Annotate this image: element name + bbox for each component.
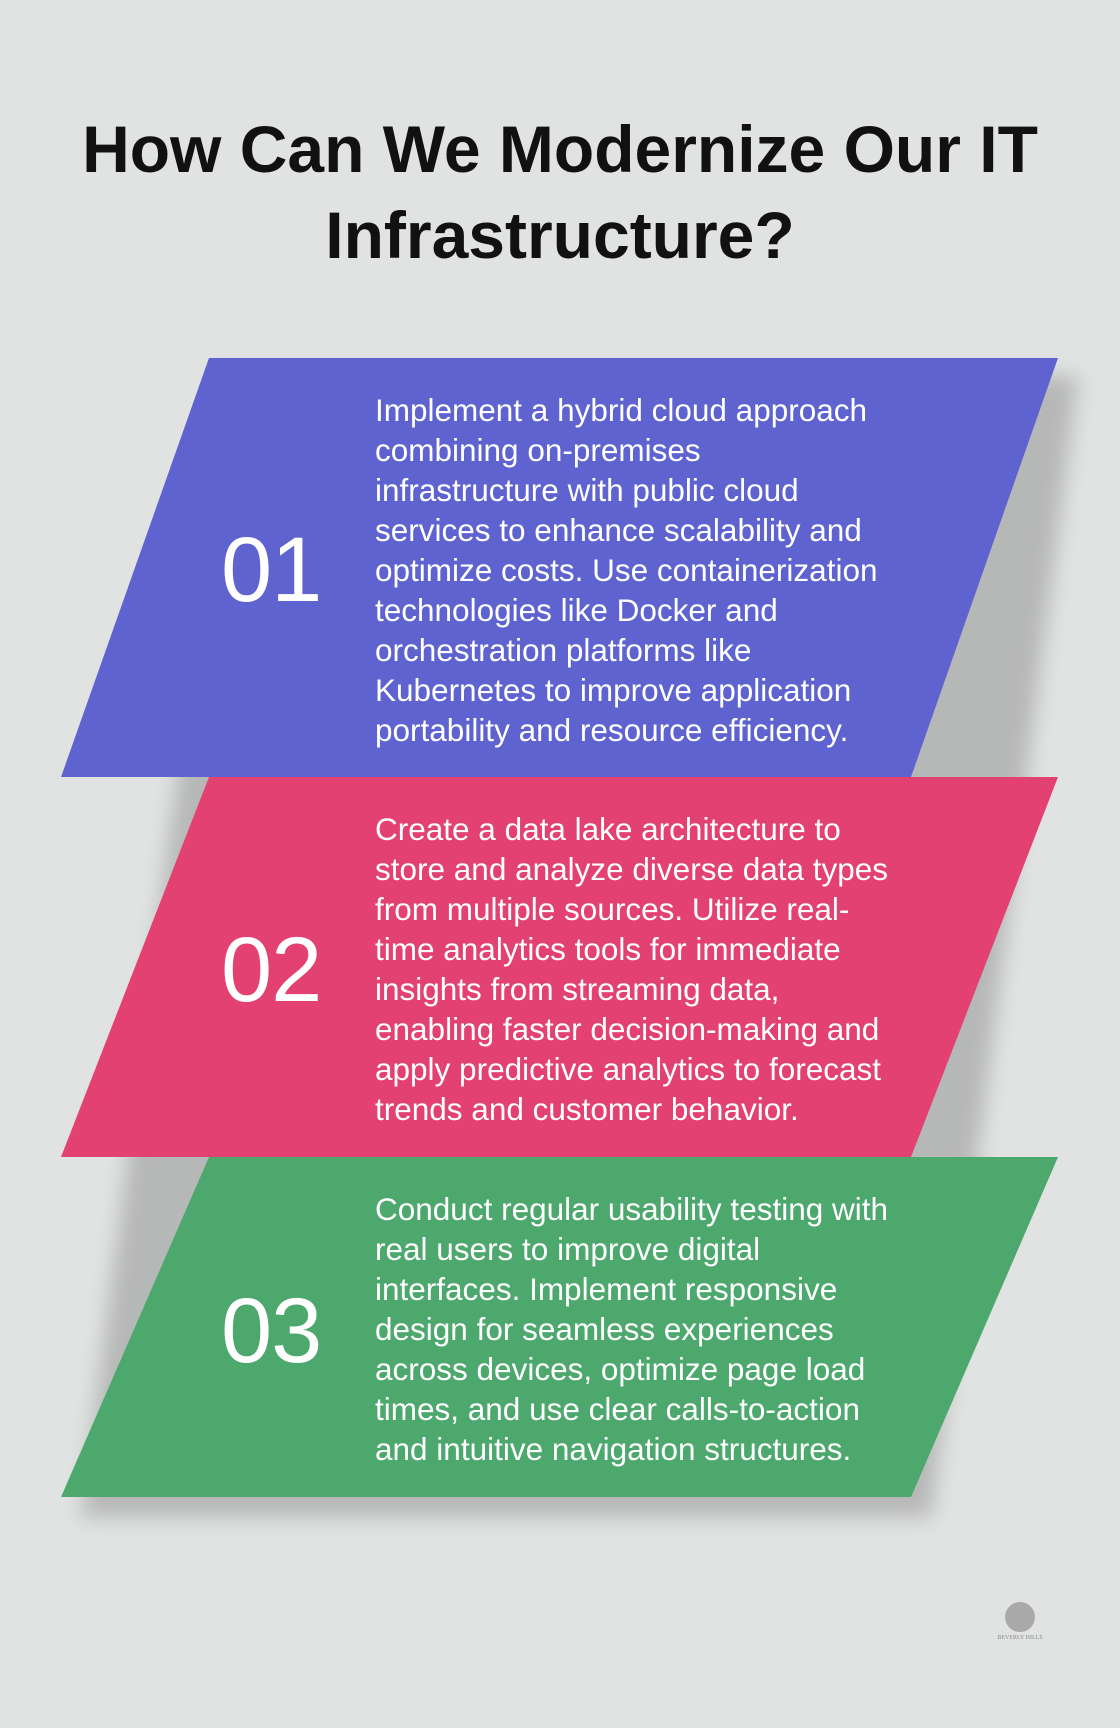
text 02: trends and customer behavior. (375, 1091, 799, 1127)
title: How Can We Modernize Our IT (82, 112, 1038, 186)
text 02: apply predictive analytics to forecast (375, 1051, 881, 1087)
text 01: Kubernetes to improve application (375, 672, 851, 708)
number 01: 01 (221, 519, 321, 621)
text 03: across devices, optimize page load (375, 1351, 865, 1387)
panel: 01 (61, 358, 1058, 777)
text 01: orchestration platforms like (375, 632, 751, 668)
text 02: from multiple sources. Utilize real- (375, 891, 849, 927)
text 03: times, and use clear calls-to-action (375, 1391, 860, 1427)
panel: 03 (61, 1157, 1058, 1497)
panel: 02 (61, 777, 1058, 1157)
text 01: optimize costs. Use containerization (375, 552, 877, 588)
text 02 (375, 811, 888, 1127)
number 03: 03 (221, 1280, 321, 1382)
text 03: Conduct regular usability testing with (375, 1191, 888, 1227)
text 02: store and analyze diverse data types (375, 851, 888, 887)
text 03: and intuitive navigation structures. (375, 1431, 851, 1467)
text 01 (375, 392, 877, 748)
text 01: infrastructure with public cloud (375, 472, 799, 508)
number 02: 02 (221, 919, 321, 1021)
text 03 (375, 1191, 888, 1467)
text 02: insights from streaming data, (375, 971, 779, 1007)
text 02: enabling faster decision-making and (375, 1011, 879, 1047)
text 03: real users to improve digital (375, 1231, 760, 1267)
text 01: portability and resource efficiency. (375, 712, 848, 748)
text 03: interfaces. Implement responsive (375, 1271, 837, 1307)
text 01: services to enhance scalability and (375, 512, 862, 548)
text 02: time analytics tools for immediate (375, 931, 841, 967)
title: Infrastructure? (325, 198, 795, 272)
logo: BEVERLY HILLS (997, 1635, 1043, 1641)
text 01: technologies like Docker and (375, 592, 778, 628)
text 03: design for seamless experiences (375, 1311, 834, 1347)
logo (997, 1602, 1043, 1641)
title (82, 112, 1038, 272)
text 02: Create a data lake architecture to (375, 811, 841, 847)
text 01: combining on-premises (375, 432, 701, 468)
text 01: Implement a hybrid cloud approach (375, 392, 867, 428)
